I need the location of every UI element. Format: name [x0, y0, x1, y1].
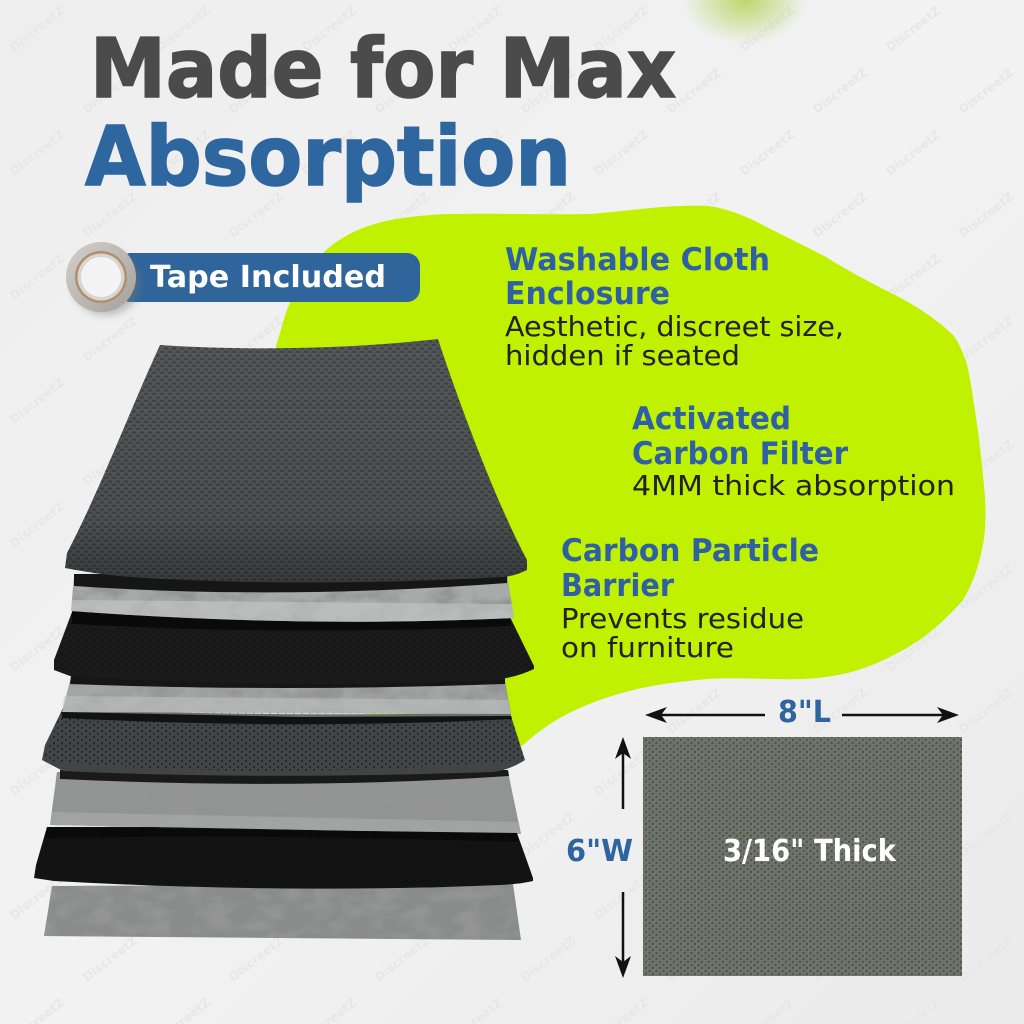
width label: 6"W	[566, 834, 633, 869]
icon: tape roll	[66, 242, 140, 315]
feature: activated carbon filter: 4MM thick absorption	[632, 469, 955, 502]
feature: washable cloth enclosure: hidden if seated	[505, 339, 740, 372]
black sheet 3	[34, 827, 533, 889]
feature: carbon particle barrier: on furniture	[561, 631, 734, 664]
feature: washable cloth enclosure: Washable Cloth	[505, 242, 770, 278]
title: Absorption	[85, 110, 571, 205]
green glow	[683, 0, 807, 44]
feature: carbon particle barrier	[561, 533, 819, 664]
label pill	[118, 253, 420, 302]
feature: carbon particle barrier: Carbon Particle	[561, 533, 819, 569]
feature: carbon particle barrier: Barrier	[561, 568, 675, 604]
title	[85, 22, 676, 205]
black sheet 1	[54, 612, 534, 684]
stack of filters	[34, 339, 534, 940]
feature: activated carbon filter: Carbon Filter	[632, 436, 849, 472]
sample swatch	[643, 737, 962, 976]
gray sheet 3	[50, 772, 521, 834]
arrow: width	[615, 737, 631, 978]
title: Made for Max	[90, 22, 676, 117]
feature: washable cloth enclosure: Enclosure	[505, 276, 670, 312]
feature: carbon particle barrier: Prevents residue	[561, 602, 804, 635]
dark mesh sheet 2	[42, 710, 525, 776]
feature: activated carbon filter: Activated	[632, 401, 791, 437]
green blob	[276, 206, 986, 746]
sample swatch: 3/16" Thick	[723, 834, 897, 869]
top mesh sheet	[65, 339, 527, 582]
feature: washable cloth enclosure: Aesthetic, discreet size,	[505, 310, 844, 343]
feature: activated carbon filter	[632, 401, 955, 502]
arrow: length	[645, 707, 959, 723]
gray sheet 2	[62, 677, 511, 714]
tape included label	[66, 242, 420, 315]
feature: washable cloth enclosure	[505, 242, 844, 372]
length label: 8"L	[778, 695, 831, 730]
bottom gray sheet	[44, 884, 521, 940]
label text: Tape Included	[150, 260, 386, 295]
gray sheet 1	[71, 574, 514, 622]
